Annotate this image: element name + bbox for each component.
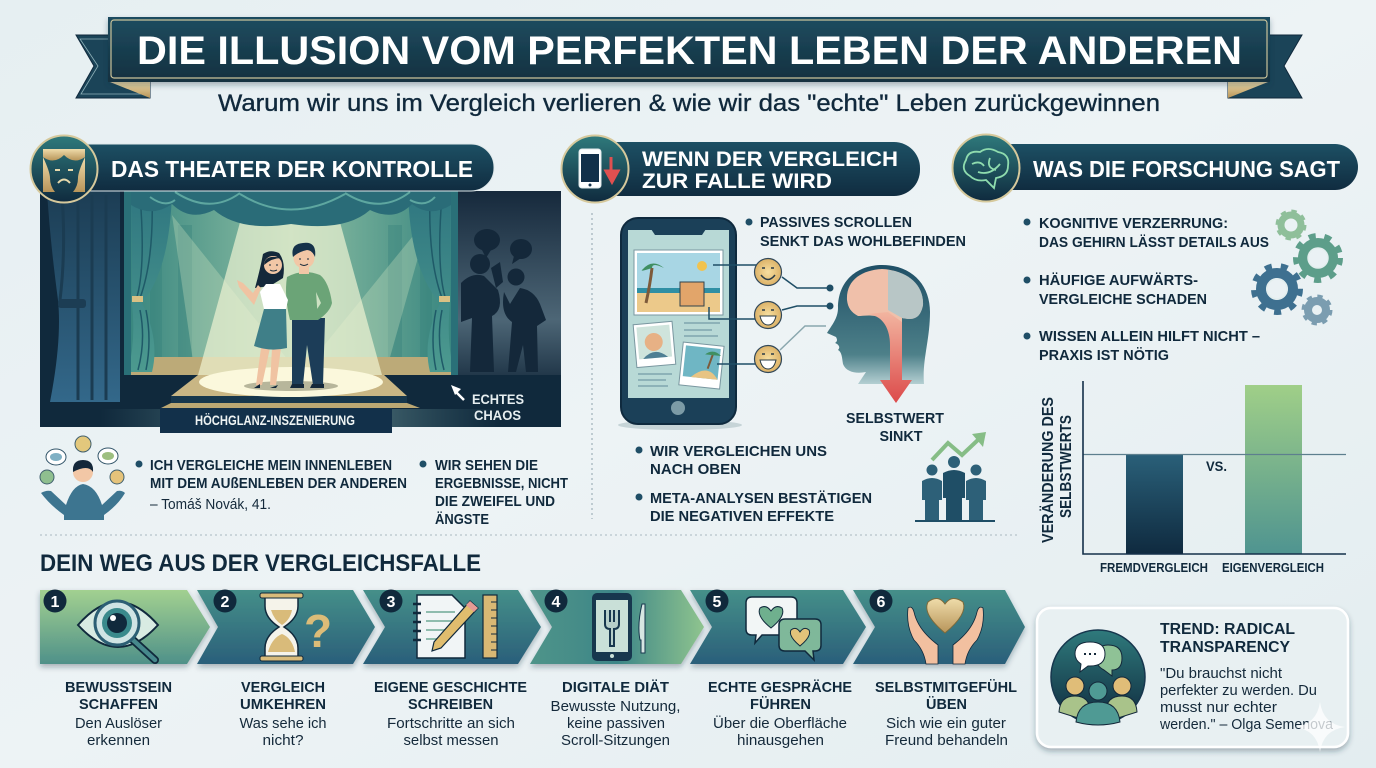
step 6: Sich wie ein guter <box>886 716 1006 732</box>
section 1 heading <box>30 136 494 202</box>
icon: chat bubbles with hearts <box>746 597 821 660</box>
icon: gears <box>1254 212 1340 323</box>
step 1: 1 <box>51 594 60 611</box>
icon: emoji 1 <box>754 258 782 286</box>
step 4 <box>530 590 704 749</box>
text: research bullets: DAS GEHIRN LÄSST DETAILS AUS <box>1039 234 1269 251</box>
section 3 heading <box>952 134 1358 202</box>
label: selbstwert sinkt: SINKT <box>880 428 922 445</box>
text: research bullets: KOGNITIVE VERZERRUNG: <box>1039 215 1228 232</box>
step 2 <box>197 590 375 749</box>
central spotlight <box>198 215 382 375</box>
text: passives scrollen: PASSIVES SCROLLEN <box>760 214 912 231</box>
text: trend heading: TREND: RADICAL <box>1160 621 1295 638</box>
text: bullets left <box>136 457 407 513</box>
label: selbstwert sinkt <box>846 410 944 445</box>
text: bullets right: WIR SEHEN DIE <box>435 457 538 474</box>
step 4: DIGITALE DIÄT <box>562 679 669 696</box>
step 6: 6 <box>877 594 886 611</box>
step 5: Über die Oberfläche <box>713 714 847 732</box>
right chaos panel <box>458 191 561 375</box>
curtain left <box>128 191 172 372</box>
step 5: ECHTE GESPRÄCHE <box>708 679 852 696</box>
text: trend heading: TRANSPARENCY <box>1160 639 1290 656</box>
text: research bullets: PRAXIS IST NÖTIG <box>1039 347 1169 364</box>
step 1 <box>40 590 210 749</box>
icon: emoji 2 <box>754 302 782 328</box>
text: passives scrollen <box>746 214 966 250</box>
icon: notebook, pencil, ruler <box>413 595 497 658</box>
icon: curtain <box>30 136 98 202</box>
text: wir vergleichen: NACH OBEN <box>650 461 741 478</box>
step 2: Was sehe ich <box>240 716 326 732</box>
step 6: SELBSTMITGEFÜHL <box>875 679 1017 696</box>
step 1: SCHAFFEN <box>79 696 158 713</box>
couple: woman <box>237 251 288 388</box>
bar chart: EIGENVERGLEICH <box>1222 561 1324 575</box>
section 3 heading: WAS DIE FORSCHUNG SAGT <box>1033 156 1340 182</box>
icon: people with rising arrow <box>915 432 995 521</box>
step 1: Den Auslöser <box>75 716 162 732</box>
photo: island <box>679 342 724 389</box>
label: echtes chaos: CHAOS <box>474 407 521 423</box>
step 3: SCHREIBEN <box>408 696 493 713</box>
step 5: 5 <box>713 594 722 611</box>
illustration: phone feed <box>618 218 742 430</box>
step 5 <box>690 590 866 749</box>
text: bullets right: DIE ZWEIFEL UND <box>435 493 555 510</box>
label: echtes chaos: ECHTES <box>472 391 524 407</box>
text: quote: werden." – Olga Semenova <box>1159 717 1334 733</box>
text: research bullets <box>1024 215 1269 364</box>
label: hochglanz: HÖCHGLANZ-INSZENIERUNG <box>195 412 355 428</box>
label strip <box>100 409 500 427</box>
text: research bullets: WISSEN ALLEIN HILFT NICHT – <box>1039 328 1260 345</box>
step 4: Scroll-Sitzungen <box>561 733 670 749</box>
step 1: BEWUSSTSEIN <box>65 679 172 696</box>
step 6: ÜBEN <box>926 696 967 713</box>
step 4: Bewusste Nutzung, <box>550 699 680 715</box>
step 3: selbst messen <box>404 733 498 749</box>
text: bullets left: ICH VERGLEICHE MEIN INNENLEBEN <box>150 457 392 474</box>
text: bullets right: ERGEBNISSE, NICHT <box>435 475 568 492</box>
section 2 heading: ZUR FALLE WIRD <box>642 170 832 193</box>
bar chart: SELBSTWERTS <box>1058 415 1075 518</box>
step 5: FÜHREN <box>750 696 811 713</box>
emoji connectors <box>709 265 830 364</box>
subtitle: Warum wir uns im Vergleich verlieren & wie wir das "echte" Leben zurückgewinnen <box>218 90 1160 117</box>
photo: beach <box>634 250 723 315</box>
step 6: Freund behandeln <box>885 733 1008 749</box>
icon: hourglass and question mark <box>260 593 332 661</box>
bar chart <box>1039 381 1346 575</box>
bar chart: VERÄNDERUNG DES <box>1039 397 1057 543</box>
side spotlights <box>172 215 430 375</box>
bar: fremdvergleich <box>1126 454 1183 554</box>
curtain right <box>408 191 454 372</box>
text: bullets left: MIT DEM AUßENLEBEN DER ANDEREN <box>150 475 407 492</box>
text: meta-analysen: DIE NEGATIVEN EFFEKTE <box>650 508 834 525</box>
bar: eigenvergleich <box>1245 385 1302 554</box>
text: meta-analysen <box>636 490 872 525</box>
step 1: erkennen <box>87 733 150 749</box>
text: quote: perfekter zu werden. Du <box>1160 683 1317 699</box>
step 4: keine passiven <box>567 716 665 732</box>
valance <box>131 191 451 226</box>
icon: phone with cutlery <box>592 593 645 661</box>
text: quote: musst nur echter <box>1160 700 1277 716</box>
step 3: Fortschritte an sich <box>387 716 515 732</box>
text: meta-analysen: META-ANALYSEN BESTÄTIGEN <box>650 490 872 507</box>
photo: portrait <box>633 321 676 368</box>
title: DIE ILLUSION VOM PERFEKTEN LEBEN DER ANDEREN <box>137 29 1242 73</box>
step 6 <box>853 590 1025 749</box>
dark left curtain <box>47 191 120 402</box>
icon: emoji 3 <box>754 346 782 372</box>
silhouette: person two <box>503 268 546 372</box>
text: passives scrollen: SENKT DAS WOHLBEFINDEN <box>760 233 966 250</box>
proscenium pillars <box>124 191 131 375</box>
text: bullets right <box>420 457 568 528</box>
section 2 heading: WENN DER VERGLEICH <box>642 148 898 171</box>
platform <box>171 375 407 396</box>
icon: brain <box>952 134 1020 202</box>
arrow: to chaos <box>451 385 464 400</box>
text: wir vergleichen: WIR VERGLEICHEN UNS <box>650 443 827 460</box>
step 4: 4 <box>552 594 561 611</box>
step 2: UMKEHREN <box>240 696 326 713</box>
step 3 <box>363 590 541 749</box>
icon: phone arrow <box>562 136 628 202</box>
step 3: EIGENE GESCHICHTE <box>374 679 527 696</box>
label: hochglanz <box>160 408 392 433</box>
heading: dein weg: DEIN WEG AUS DER VERGLEICHSFALLE <box>40 550 481 577</box>
text: bullets right: ÄNGSTE <box>435 511 489 528</box>
speech bubbles <box>474 229 532 264</box>
icon: eye with magnifier <box>78 601 158 660</box>
step 2: VERGLEICH <box>241 679 325 696</box>
step 2: nicht? <box>262 733 304 749</box>
icon: hourglass and question mark: ? <box>304 605 332 657</box>
text: research bullets: VERGLEICHE SCHADEN <box>1039 291 1207 308</box>
label: selbstwert sinkt: SELBSTWERT <box>846 410 944 427</box>
label: echtes chaos <box>472 391 524 423</box>
text: research bullets: HÄUFIGE AUFWÄRTS- <box>1039 272 1198 289</box>
step 2: 2 <box>221 594 230 611</box>
text: trend heading <box>1160 621 1295 656</box>
step 3: 3 <box>387 594 396 611</box>
couple: man <box>286 243 332 388</box>
section 2 heading <box>562 136 920 202</box>
text: quote <box>1159 666 1334 733</box>
text: quote: "Du brauchst nicht <box>1160 666 1282 682</box>
icon: community with chat <box>1051 630 1145 725</box>
text: wir vergleichen <box>636 443 827 478</box>
text: bullets left: – Tomáš Novák, 41. <box>150 497 271 513</box>
silhouette: person one <box>461 254 503 372</box>
icon: person with emotions <box>40 436 125 520</box>
step 5: hinausgehen <box>737 733 824 749</box>
panel: trend card <box>1037 608 1348 752</box>
icon: head with brain <box>827 265 930 403</box>
icon: hands holding heart <box>908 598 983 664</box>
panel: theater stage illustration <box>40 191 561 427</box>
stage floor <box>125 357 458 375</box>
bar chart: FREMDVERGLEICH <box>1100 561 1208 575</box>
bar chart: VS. <box>1206 458 1227 474</box>
spotlight ellipse <box>199 367 383 397</box>
backdrop <box>131 191 451 358</box>
title banner <box>76 17 1302 98</box>
section 1 heading: DAS THEATER DER KONTROLLE <box>111 156 473 182</box>
